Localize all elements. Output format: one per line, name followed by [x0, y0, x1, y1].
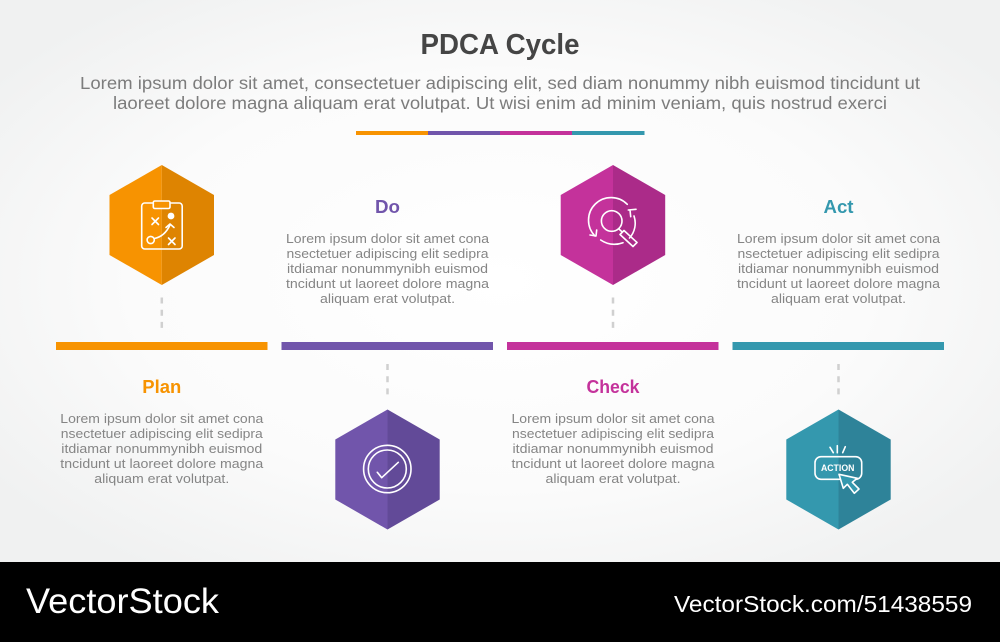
text block: Do — [286, 232, 489, 306]
text block: Check — [512, 412, 714, 486]
icon: do hexagon with check badge — [335, 410, 440, 530]
subtitle text block — [80, 73, 920, 113]
heading: Do: Do — [375, 196, 400, 217]
text block: Do: Lorem ipsum dolor sit amet cona — [286, 232, 489, 246]
icon: check hexagon with magnifier — [561, 165, 665, 285]
title underline: four colour segments — [356, 131, 644, 135]
icon: act hexagon with action button — [786, 410, 891, 530]
text block: Act: aliquam erat volutpat. — [771, 292, 906, 306]
text block: Check: nsectetuer adipiscing elit sedipra — [512, 427, 714, 441]
text block: Plan: Lorem ipsum dolor sit amet cona — [60, 412, 263, 426]
text block: Act: itdiamar nonummynibh euismod — [738, 262, 939, 276]
watermark footer bar — [0, 562, 1000, 642]
text block: Act: tncidunt ut laoreet dolore magna — [737, 277, 940, 291]
text block: Do: itdiamar nonummynibh euismod — [287, 262, 488, 276]
heading: Check: Check — [586, 376, 640, 397]
subtitle text block: Lorem ipsum dolor sit amet, consectetuer adipiscing elit, sed diam nonummy nibh euismod tincidunt ut — [80, 73, 920, 93]
text block: Plan: itdiamar nonummynibh euismod — [61, 442, 262, 456]
icon: plan hexagon with clipboard — [110, 165, 214, 285]
text block: Plan: tncidunt ut laoreet dolore magna — [60, 457, 263, 471]
watermark footer bar: VectorStock — [26, 582, 220, 621]
text block: Check: aliquam erat volutpat. — [546, 472, 680, 486]
text block: Check: tncidunt ut laoreet dolore magna — [512, 457, 714, 471]
text block: Do: aliquam erat volutpat. — [320, 292, 455, 306]
text block: Act: Lorem ipsum dolor sit amet cona — [737, 232, 940, 246]
text block: Act — [737, 232, 940, 306]
title: PDCA Cycle — [420, 29, 580, 61]
text block: Act: nsectetuer adipiscing elit sedipra — [738, 247, 940, 261]
icon: act hexagon with action button: ACTION — [821, 463, 855, 474]
text block: Do: nsectetuer adipiscing elit sedipra — [286, 247, 488, 261]
text block: Plan: nsectetuer adipiscing elit sedipra — [61, 427, 263, 441]
subtitle text block: laoreet dolore magna aliquam erat volutpat. Ut wisi enim ad minim veniam, quis nostrud exerci — [113, 93, 887, 113]
heading: Plan: Plan — [142, 376, 181, 397]
heading: Act: Act — [824, 196, 854, 217]
text block: Check: Lorem ipsum dolor sit amet cona — [512, 412, 714, 426]
text block: Plan — [60, 412, 263, 486]
timeline bars — [56, 342, 944, 350]
dashed connectors — [162, 298, 839, 397]
text block: Do: tncidunt ut laoreet dolore magna — [286, 277, 489, 291]
watermark footer bar: VectorStock.com/51438559 — [674, 591, 972, 617]
text block: Plan: aliquam erat volutpat. — [94, 472, 229, 486]
text block: Check: itdiamar nonummynibh euismod — [512, 442, 714, 456]
